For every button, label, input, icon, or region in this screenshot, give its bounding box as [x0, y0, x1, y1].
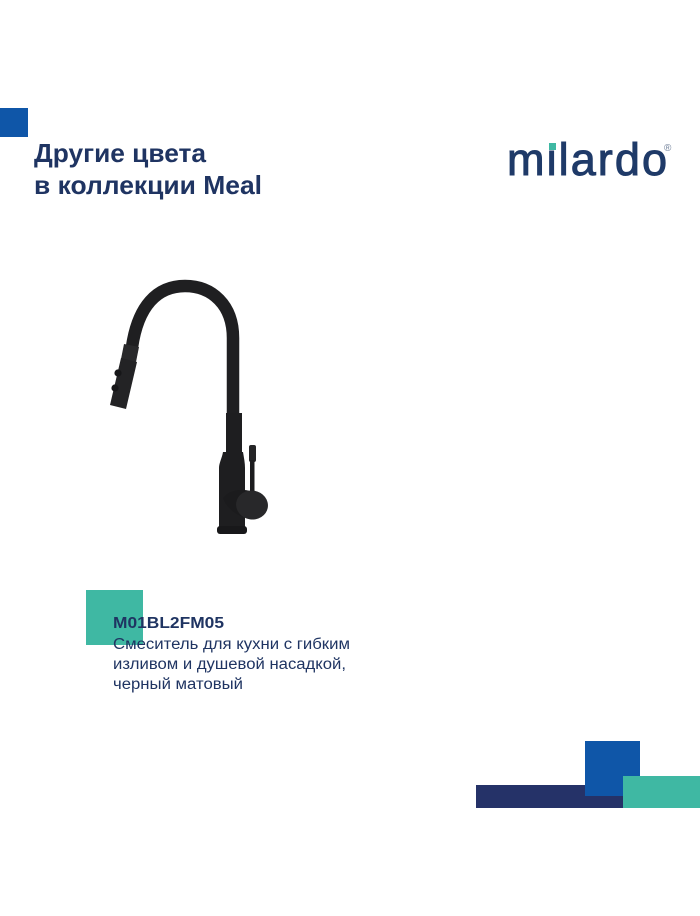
blue corner square: [0, 108, 28, 137]
product description: Смеситель для кухни с гибким: [113, 636, 350, 653]
title: в коллекции Meal: [34, 170, 262, 200]
milardo logo: milardo: [507, 134, 667, 185]
product description: M01BL2FM05: [113, 615, 224, 632]
faucet product image: [110, 286, 270, 534]
title: [34, 138, 262, 200]
bottom-right colour blocks: [476, 741, 700, 808]
product description: [113, 615, 350, 693]
lever handle: [249, 445, 256, 494]
base ring: [217, 526, 247, 534]
milardo logo: ®: [664, 143, 672, 154]
pull-out spray head: [110, 344, 139, 409]
title: Другие цвета: [34, 138, 207, 168]
faucet body: [219, 413, 245, 527]
mixer cylinder: [223, 488, 270, 522]
product description: черный матовый: [113, 676, 243, 693]
flexible spout: [132, 286, 233, 415]
product description: изливом и душевой насадкой,: [113, 656, 346, 673]
teal square behind description: [86, 590, 143, 645]
